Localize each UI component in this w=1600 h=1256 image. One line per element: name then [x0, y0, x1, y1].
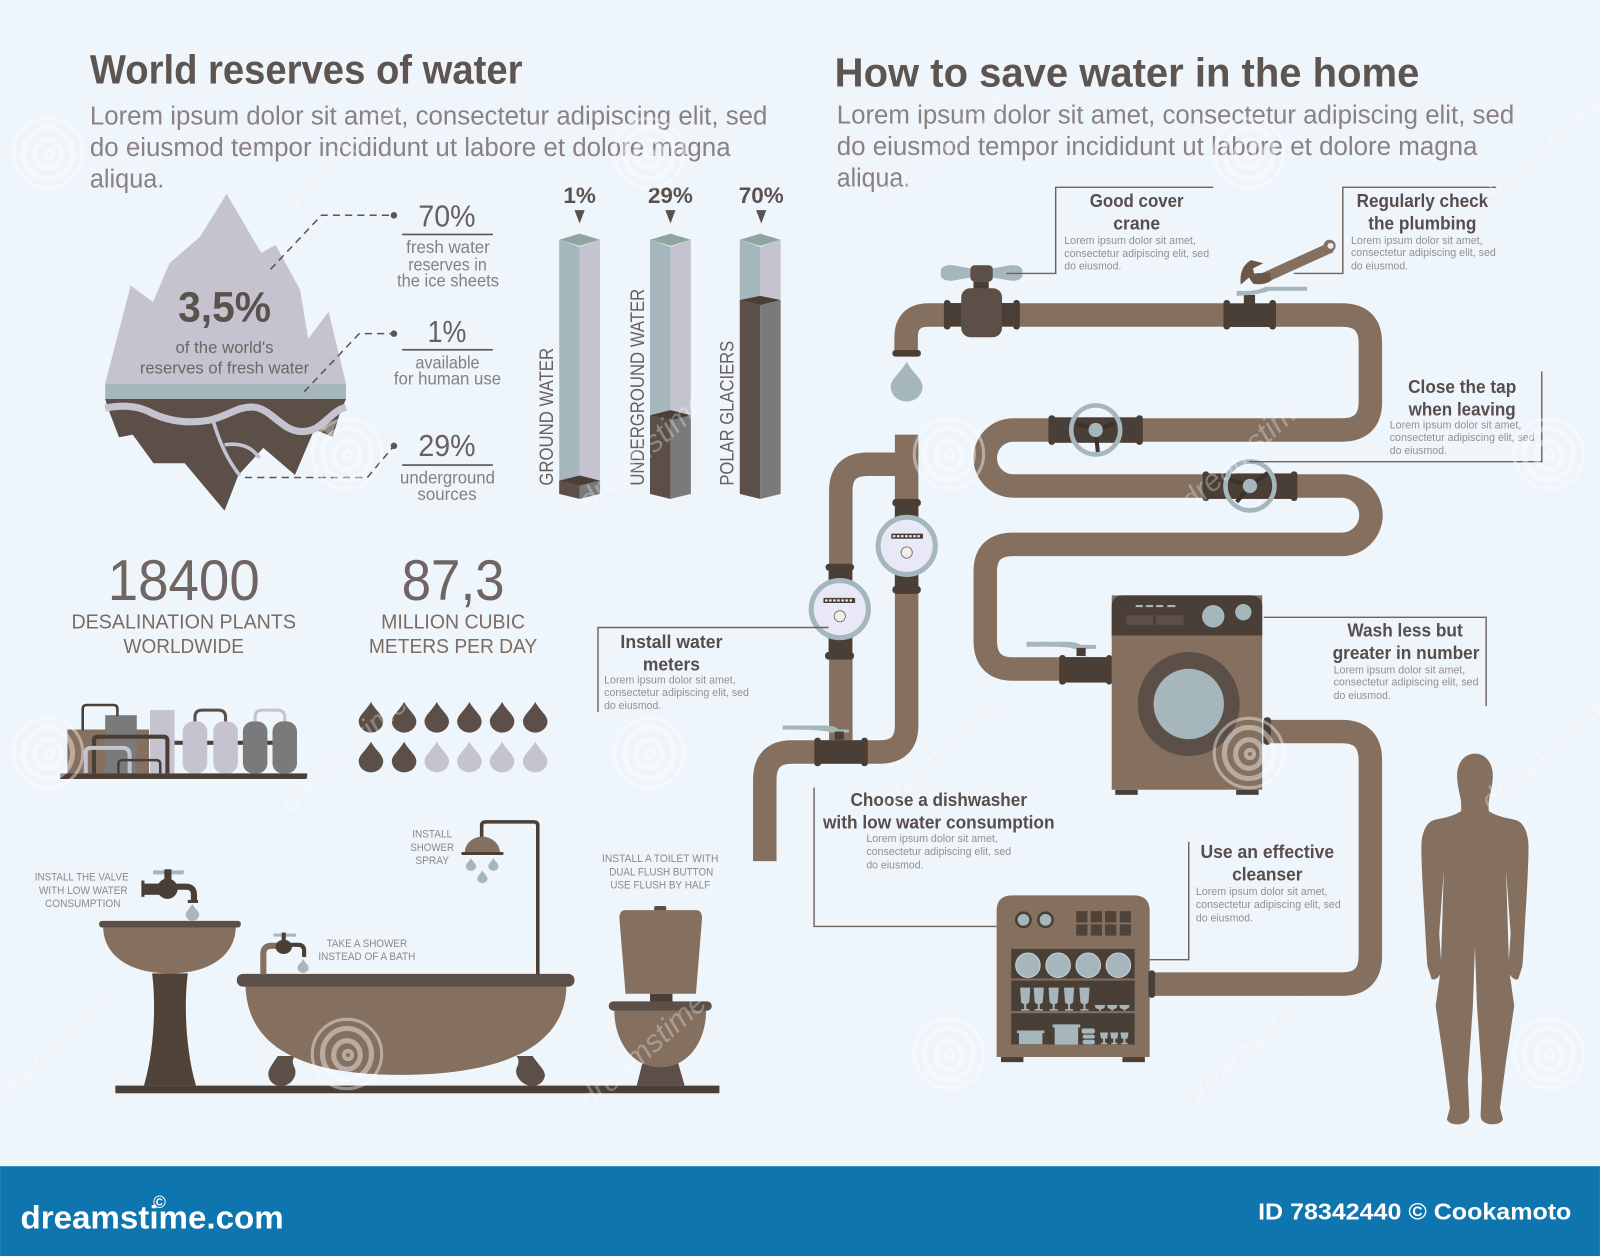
callout: close the tap: when leaving — [1408, 398, 1516, 419]
callout: dishwasher — [814, 788, 1055, 926]
stat: cubic meters: 87,3 — [402, 549, 505, 613]
callout: dishwasher: with low water consumption — [822, 811, 1055, 832]
stat: 70%: 70% — [418, 200, 476, 234]
watermark: dreamstime — [273, 85, 414, 217]
stat: desalination plants: WORLDWIDE — [124, 636, 244, 658]
intro text: world reserves: aliqua. — [90, 166, 164, 194]
callout: wash less — [1264, 617, 1486, 706]
pillar: underground water — [627, 183, 693, 499]
callout: close the tap — [1249, 371, 1542, 462]
valve wheel: upper — [1048, 405, 1143, 454]
callout: wash less: do eiusmod. — [1334, 690, 1391, 702]
callout: check plumbing: do eiusmod. — [1351, 260, 1408, 272]
human figure — [1421, 754, 1529, 1124]
pillar: polar glaciers — [717, 183, 784, 499]
pipe network: meter branch — [765, 435, 907, 861]
dashed leader lines — [245, 212, 397, 478]
callout: cleanser: Lorem ipsum dolor sit amet, — [1196, 886, 1327, 898]
dishwasher — [997, 895, 1155, 1062]
iceberg caption — [140, 339, 310, 377]
label: shower spray — [410, 829, 454, 867]
icon: toilet — [609, 906, 712, 1086]
icon: sink — [99, 921, 241, 1086]
footer logo mark: © — [153, 1192, 166, 1212]
callout: dishwasher: do eiusmod. — [866, 859, 923, 871]
pillar arrow — [665, 210, 676, 223]
stat: 29% — [400, 429, 495, 504]
callout: water meters: consectetur adipiscing elit, sed — [604, 687, 749, 699]
watermark: dreamstime — [1174, 385, 1315, 517]
callout: dishwasher: consectetur adipiscing elit, sed — [866, 846, 1011, 858]
callout: good cover crane: do eiusmod. — [1064, 260, 1121, 272]
callout: check plumbing — [1294, 187, 1496, 273]
pipe network: lower run — [1151, 732, 1370, 984]
callout: check plumbing: consectetur adipiscing elit, sed — [1351, 247, 1496, 259]
pillar label: GROUND WATER — [536, 348, 558, 486]
washing machine — [1112, 595, 1271, 795]
drip flange — [892, 350, 921, 357]
intro text: world reserves: Lorem ipsum dolor sit amet, consectetur adipiscing elit, sed — [90, 102, 767, 130]
watermark: dreamstime — [872, 85, 1013, 217]
label: toilet — [602, 853, 718, 892]
stat: cubic meters — [369, 549, 538, 658]
bathroom floor — [115, 1086, 719, 1093]
valve and wrench: plumbing check — [1223, 240, 1336, 330]
pillar value: 1% — [563, 183, 596, 208]
callout: good cover crane: Good cover — [1090, 190, 1184, 211]
stat: cubic meters: MILLION CUBIC — [381, 612, 525, 634]
label: shower instead of bath: TAKE A SHOWER — [327, 938, 407, 950]
stat: cubic meters: METERS PER DAY — [369, 636, 538, 658]
title: save water: How to save water in the home — [835, 50, 1419, 96]
callout: cleanser: consectetur adipiscing elit, sed — [1196, 899, 1341, 911]
callout: wash less: Lorem ipsum dolor sit amet, — [1334, 664, 1465, 676]
stat: desalination plants — [71, 549, 296, 658]
watermark: dreamstime — [572, 385, 713, 517]
icon: tub tap — [263, 933, 309, 974]
stat: 70%: the ice sheets — [397, 271, 499, 291]
footer credit: ID 78342440 © Cookamoto — [1258, 1198, 1571, 1224]
stat: 1%: available — [415, 352, 480, 372]
callout: wash less: Wash less but — [1347, 620, 1463, 641]
callout: dishwasher: Choose a dishwasher — [851, 789, 1027, 810]
intro text: save water — [837, 101, 1514, 193]
stat: 29%: sources — [417, 484, 477, 504]
watermark: dreamstime — [872, 686, 1013, 818]
icon: water drops — [359, 702, 547, 772]
label: shower instead of bath — [318, 938, 415, 963]
watermark: dreamstime — [572, 985, 713, 1117]
pillar: ground water — [536, 183, 600, 499]
label: valve: WITH LOW WATER — [39, 885, 128, 897]
callout: water meters: Install water — [620, 631, 722, 652]
label: shower spray: INSTALL — [412, 829, 452, 841]
intro text: save water: aliqua. — [837, 165, 910, 193]
icon: large water drop — [891, 362, 923, 401]
callout: water meters: Lorem ipsum dolor sit amet, — [604, 675, 736, 687]
label: valve: INSTALL THE VALVE — [35, 872, 129, 884]
label: toilet: DUAL FLUSH BUTTON — [609, 866, 713, 878]
footer bar — [0, 1166, 1600, 1256]
icon: sink tap — [141, 869, 199, 921]
callout: cleanser: do eiusmod. — [1196, 912, 1253, 924]
title: world reserves: World reserves of water — [90, 47, 523, 93]
callout: check plumbing: the plumbing — [1368, 213, 1476, 234]
callout: good cover crane: crane — [1113, 213, 1160, 234]
label: valve: CONSUMPTION — [45, 898, 120, 910]
stat: desalination plants: DESALINATION PLANTS — [71, 612, 296, 634]
pipe network: main run — [906, 315, 1371, 669]
stat: 70%: reserves in — [408, 254, 487, 274]
valve: washer inlet — [1027, 642, 1112, 685]
callout: dishwasher: Lorem ipsum dolor sit amet, — [866, 833, 998, 845]
callout: close the tap: consectetur adipiscing elit, sed — [1390, 432, 1535, 444]
pillar label: POLAR GLACIERS — [717, 341, 739, 486]
label: toilet: INSTALL A TOILET WITH — [602, 853, 718, 865]
callout: close the tap: do eiusmod. — [1390, 445, 1447, 457]
iceberg — [105, 194, 346, 511]
icon: bathtub — [237, 974, 575, 1086]
valve wheel: lower — [1203, 461, 1297, 510]
callout: cleanser — [1150, 841, 1341, 960]
valve: meter branch — [783, 725, 868, 766]
stat: 1% — [394, 315, 501, 389]
callout: close the tap: Close the tap — [1408, 376, 1516, 397]
callout: wash less: greater in number — [1333, 642, 1480, 663]
callout: water meters: meters — [643, 653, 700, 674]
label: valve — [35, 872, 129, 910]
label: shower instead of bath: INSTEAD OF A BATH — [318, 951, 415, 963]
callout: cleanser: cleanser — [1232, 864, 1303, 885]
stat: 1%: for human use — [394, 369, 501, 389]
stat: 29%: 29% — [418, 429, 476, 463]
footer logo: dreamstime.com — [20, 1198, 284, 1235]
callout: water meters: do eiusmod. — [604, 700, 661, 712]
label: shower spray: SHOWER — [410, 842, 454, 854]
icon: shower — [461, 822, 538, 974]
stat: 1%: 1% — [428, 315, 466, 349]
stat: 29%: underground — [400, 468, 495, 488]
callout: check plumbing: Regularly check — [1357, 190, 1489, 211]
iceberg caption: of the world's — [176, 339, 274, 357]
pillar arrow — [756, 210, 766, 223]
callout: wash less: consectetur adipiscing elit, sed — [1334, 677, 1479, 689]
icon: desalination plant — [60, 705, 307, 779]
intro text: save water: Lorem ipsum dolor sit amet, consectetur adipiscing elit, sed — [837, 101, 1514, 129]
icon: wrench — [1240, 240, 1336, 285]
label: toilet: USE FLUSH BY HALF — [610, 880, 711, 892]
callout: close the tap: Lorem ipsum dolor sit amet, — [1390, 420, 1521, 432]
callout: cleanser: Use an effective — [1200, 841, 1334, 862]
intro text: save water: do eiusmod tempor incididunt ut labore et dolore magna — [837, 133, 1478, 161]
pillar arrow — [575, 210, 585, 223]
iceberg figure: 3,5% — [178, 283, 271, 331]
valve: cover crane — [941, 265, 1022, 337]
callout: good cover crane: Lorem ipsum dolor sit amet, — [1064, 235, 1196, 247]
intro text: world reserves — [90, 102, 767, 194]
label: shower spray: SPRAY — [415, 855, 449, 867]
water meter: left — [811, 564, 868, 660]
callout: good cover crane — [1006, 187, 1213, 273]
callout: check plumbing: Lorem ipsum dolor sit amet, — [1351, 235, 1483, 247]
stat: 70% — [397, 200, 499, 291]
pillar value: 29% — [648, 183, 693, 208]
callout: water meters — [598, 627, 829, 712]
pillar value: 70% — [739, 183, 784, 208]
iceberg caption: reserves of fresh water — [140, 359, 310, 377]
water meter: right — [878, 499, 935, 594]
watermark: dreamstime — [273, 686, 414, 818]
stat: desalination plants: 18400 — [108, 549, 260, 613]
callout: good cover crane: consectetur adipiscing elit, sed — [1064, 248, 1209, 260]
watermark: dreamstime — [1174, 985, 1315, 1117]
stat: 70%: fresh water — [406, 237, 490, 257]
intro text: world reserves: do eiusmod tempor incididunt ut labore et dolore magna — [90, 134, 731, 162]
pillar label: UNDERGROUND WATER — [627, 289, 649, 486]
